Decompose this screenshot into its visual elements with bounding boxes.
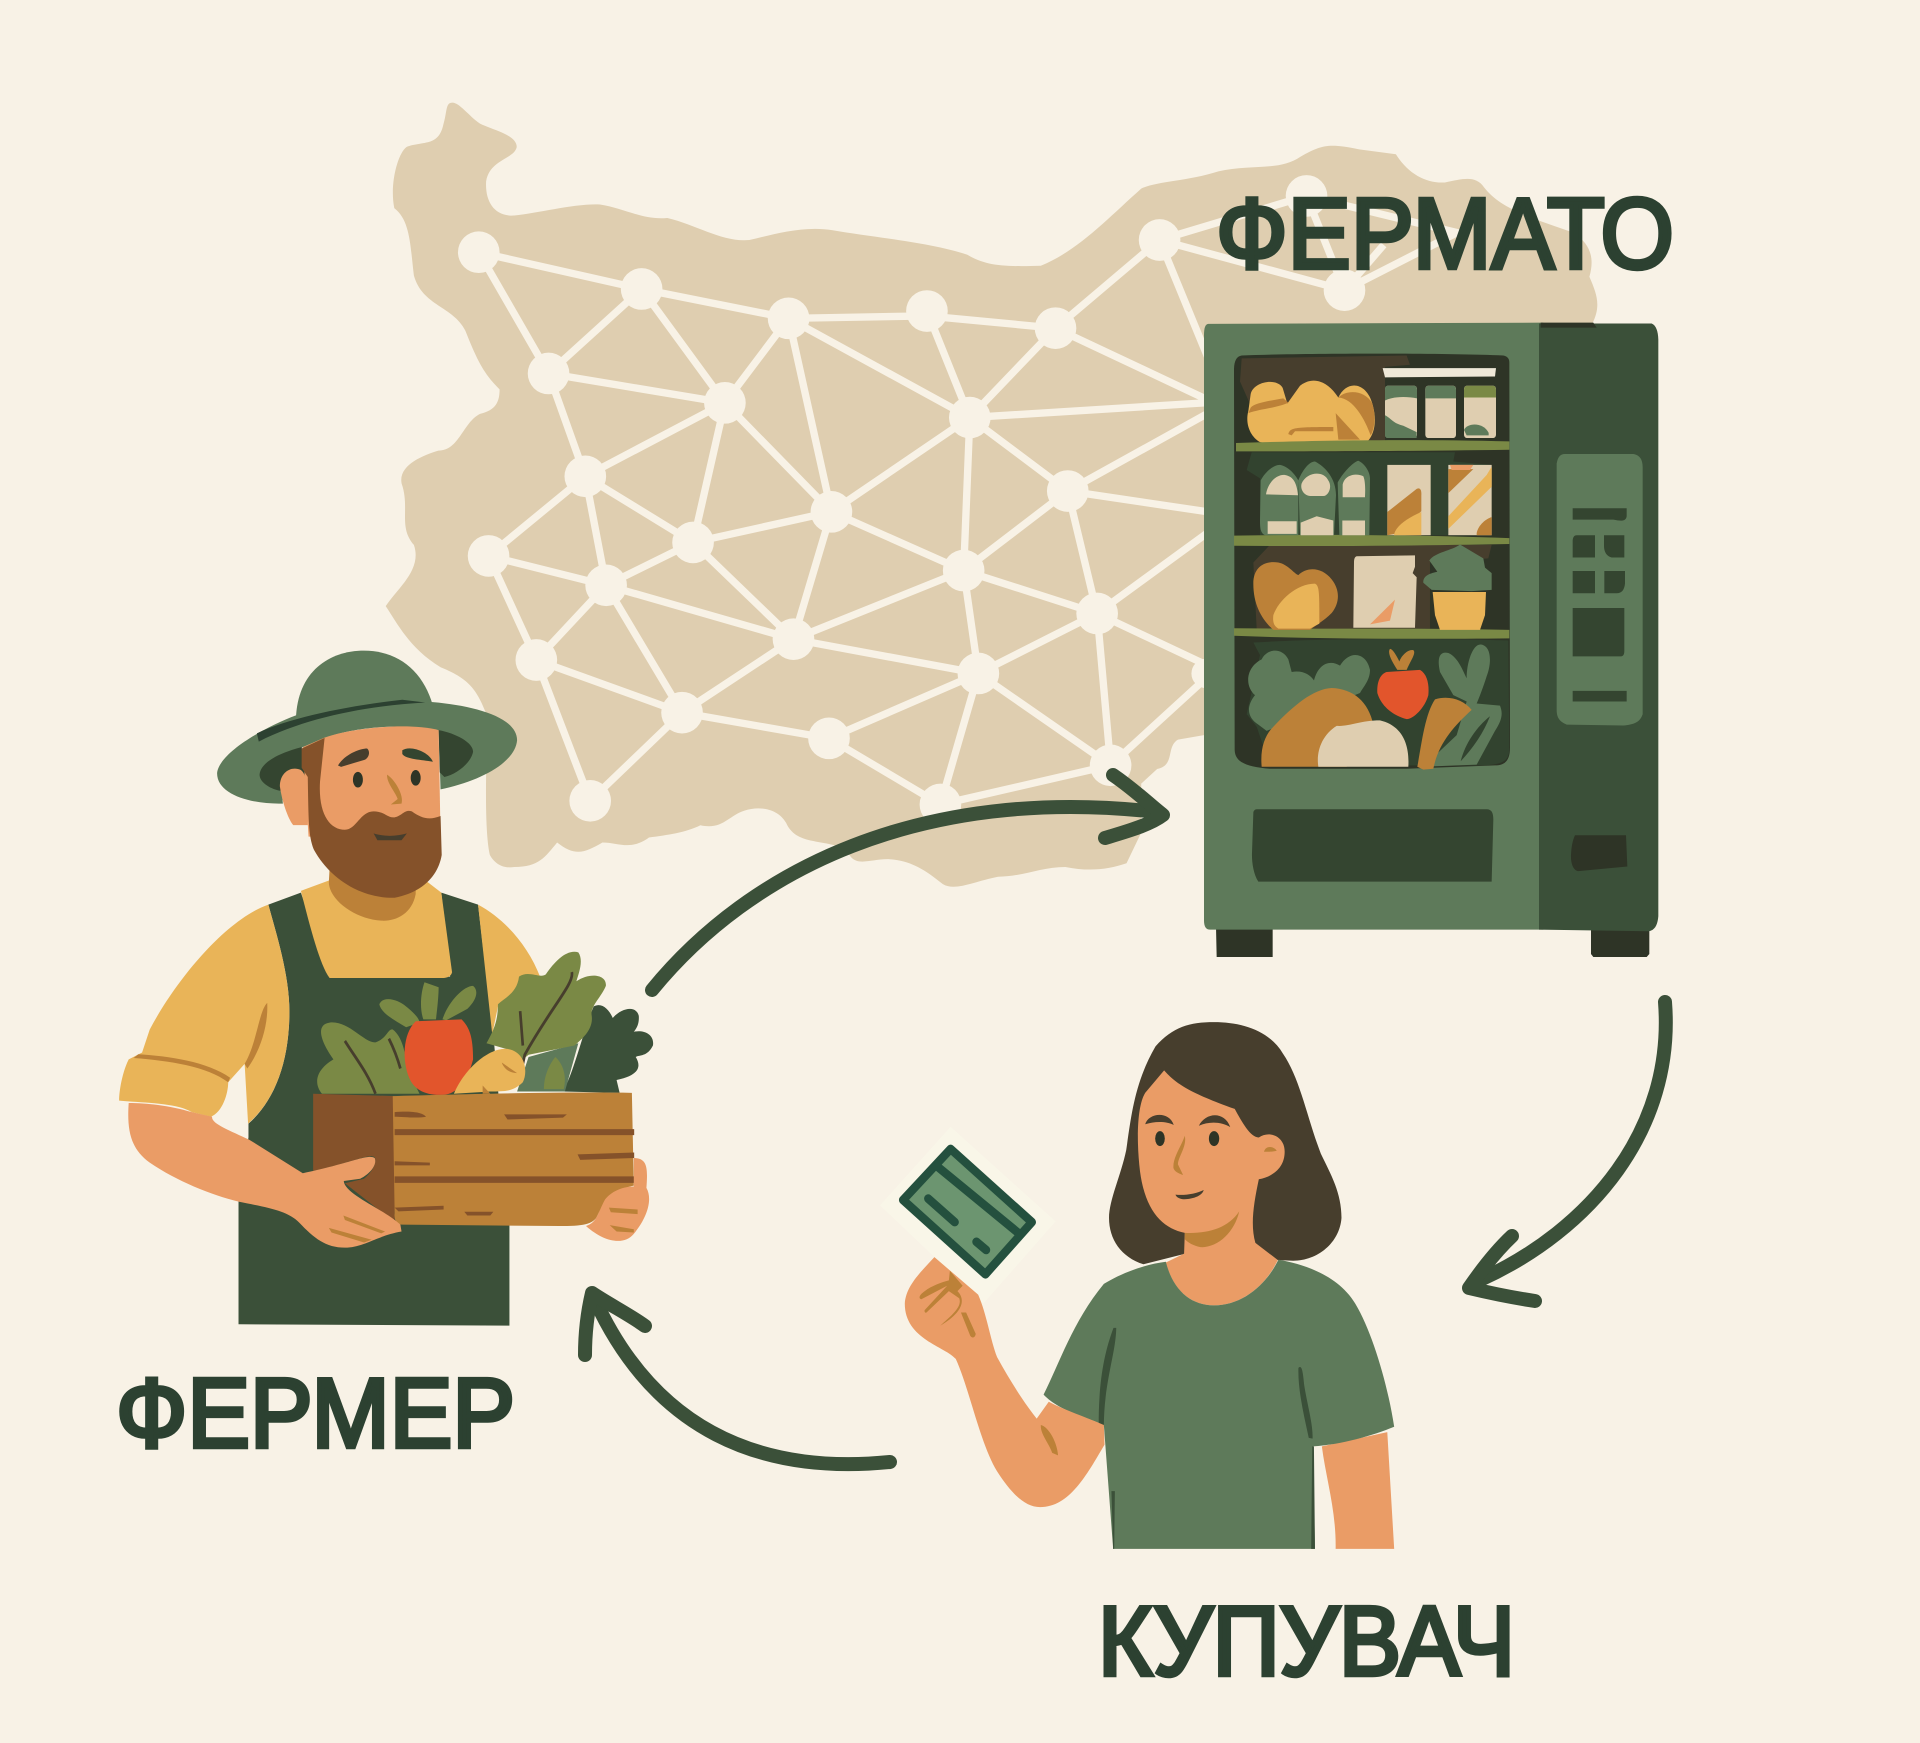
shelf 4 produce (1248, 644, 1502, 770)
machine body (1204, 323, 1543, 930)
display window (1234, 354, 1510, 769)
shelf 2 bottles (1260, 461, 1370, 535)
shelves (1234, 440, 1509, 639)
shelf 3 items (1253, 544, 1492, 630)
woman hair (1109, 1022, 1341, 1264)
dispensing slot (1252, 809, 1493, 882)
farmer hat (217, 651, 517, 804)
farmer shirt (119, 880, 540, 1124)
arrow: farmer to vending machine (652, 775, 1163, 990)
machine side panel (1539, 323, 1658, 931)
woman right arm (1322, 1432, 1394, 1549)
coin slot (1571, 835, 1627, 871)
map silhouette (386, 103, 1597, 887)
shelf 2 boxes (1387, 465, 1492, 535)
credit card (903, 1149, 1032, 1274)
heading: ФЕРМАТО: ФЕРМАТО (1216, 178, 1674, 290)
network lines (479, 196, 1457, 804)
label: ФЕРМЕР: ФЕРМЕР (116, 1358, 515, 1468)
map of Bulgaria with network (386, 103, 1597, 887)
crate (313, 1093, 634, 1226)
customer woman (880, 1022, 1394, 1549)
shelf 1 bread (1247, 381, 1375, 444)
vegetables (317, 952, 653, 1095)
control panel (1557, 454, 1643, 725)
shelf 1 jars (1383, 368, 1496, 438)
woman raised arm and hand (905, 1257, 1105, 1507)
woman t-shirt (1044, 1260, 1394, 1549)
arrow: vending machine to customer (1469, 1002, 1666, 1301)
vending machine (1204, 323, 1658, 957)
farmer hands (128, 1103, 649, 1248)
woman face and neck (1138, 1070, 1285, 1305)
credit card halo (880, 1127, 1056, 1304)
farmer apron (239, 893, 509, 1326)
sleeve folds (134, 1003, 267, 1082)
machine feet (1216, 927, 1649, 957)
arrow: customer to farmer (585, 1293, 890, 1464)
farmer (119, 651, 653, 1326)
network nodes (458, 175, 1365, 825)
shelf backgrounds (1240, 355, 1410, 441)
farmer head (280, 726, 442, 898)
label: КУПУВАЧ: КУПУВАЧ (1098, 1586, 1515, 1696)
neck shadow (329, 869, 416, 921)
